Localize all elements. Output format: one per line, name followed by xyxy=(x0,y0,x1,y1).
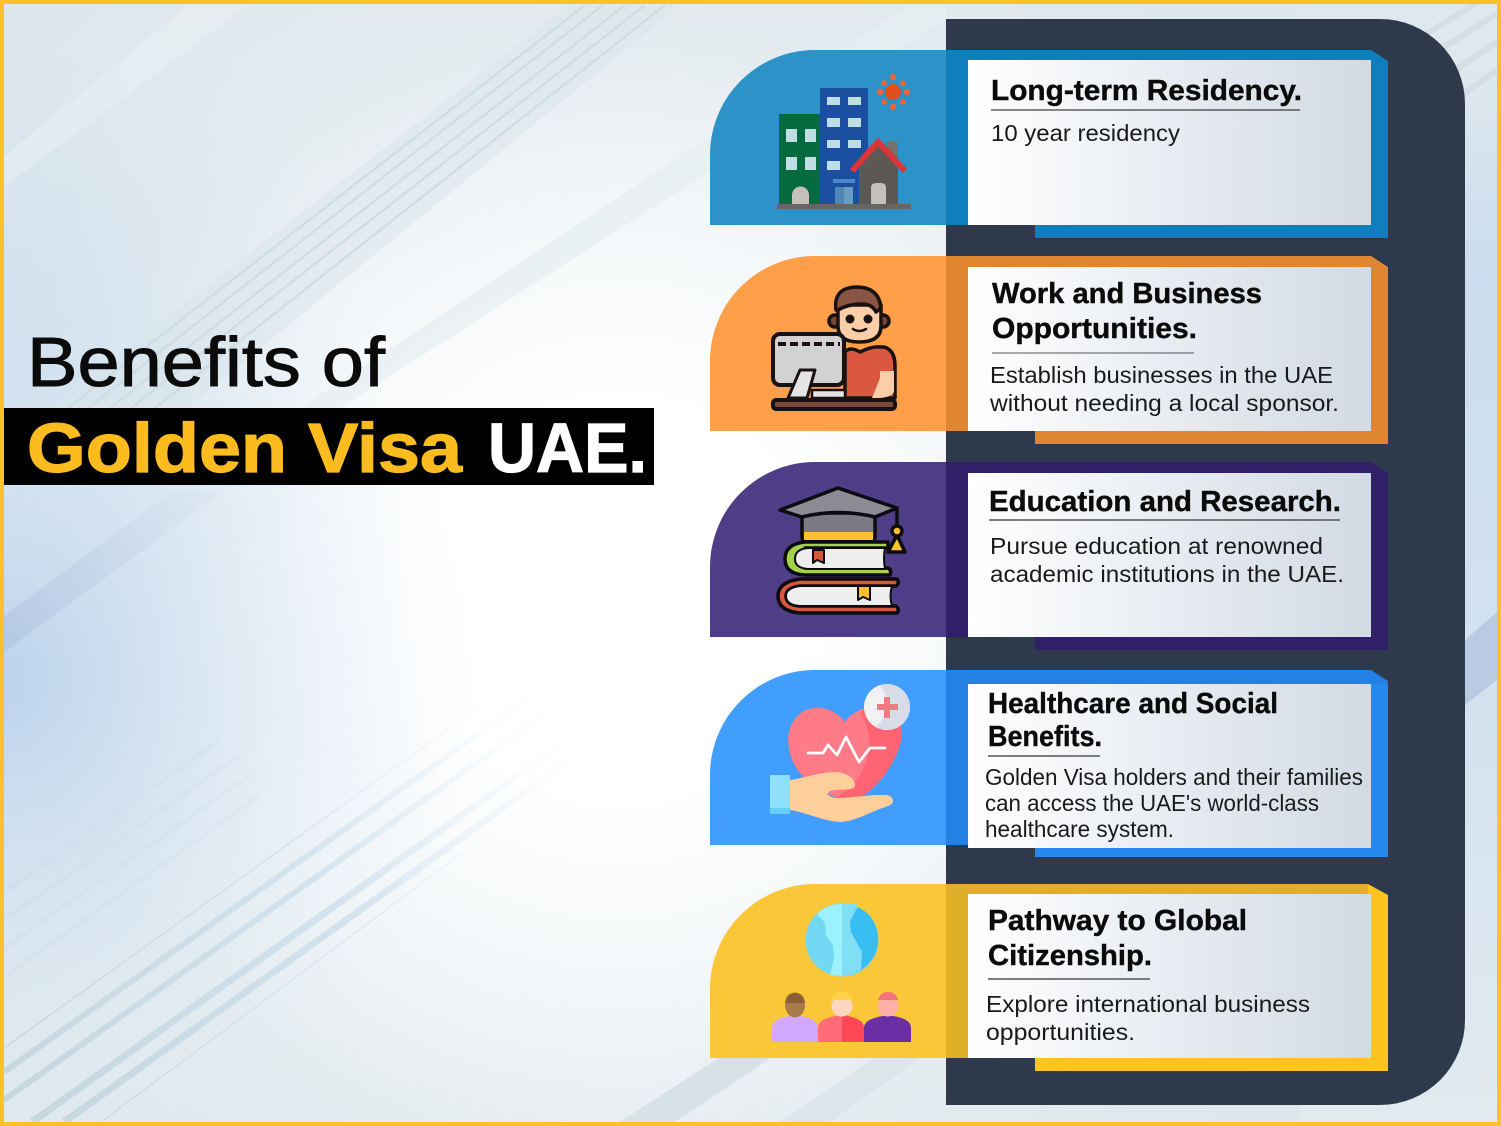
panel: healthcare and social benefits: can access the UAE's world-class xyxy=(985,790,1319,816)
title line: Golden Visa UAE: Golden Visa xyxy=(27,409,463,487)
frame xyxy=(946,884,1388,1071)
card xyxy=(968,60,1371,225)
icon: graduation cap and books xyxy=(778,488,905,613)
body text: Pursue education at renowned xyxy=(990,533,1323,559)
panel: healthcare and social benefits: healthcare system. xyxy=(985,816,1174,842)
title bar xyxy=(4,408,654,485)
heading: Healthcare and Social xyxy=(988,688,1278,720)
icon: heart in hand xyxy=(770,684,910,822)
tab xyxy=(710,884,970,1058)
card xyxy=(968,684,1371,848)
panel: work and business opportunities xyxy=(710,256,1388,444)
panel: education and research: academic institutions in the UAE. xyxy=(990,561,1344,587)
panel: healthcare and social benefits: Benefits. xyxy=(988,721,1102,753)
heading: Education and Research. xyxy=(989,486,1341,518)
heading: Pathway to Global xyxy=(988,905,1247,937)
heading: Long-term Residency. xyxy=(991,75,1302,107)
title word: UAE: UAE. xyxy=(488,409,647,487)
heading: Work and Business xyxy=(992,278,1262,310)
icon: person at computer xyxy=(773,287,895,409)
body text: 10 year residency xyxy=(991,120,1181,146)
panel: pathway to global citizenship xyxy=(710,884,1388,1071)
body text: Explore international business xyxy=(986,991,1310,1017)
panel: work and business opportunities: Opportunities. xyxy=(992,313,1197,345)
panel: pathway to global citizenship: Citizenship. xyxy=(988,940,1152,972)
body text: Establish businesses in the UAE xyxy=(990,362,1333,388)
body text: Golden Visa holders and their families xyxy=(985,764,1363,790)
panel: long-term residency xyxy=(710,50,1388,238)
panel: pathway to global citizenship: opportunities. xyxy=(986,1019,1135,1045)
tab xyxy=(710,256,970,431)
panel: education and research xyxy=(710,462,1388,650)
icon: city buildings xyxy=(777,74,911,209)
dark panel xyxy=(946,19,1465,1105)
title line: Benefits of: Benefits of xyxy=(27,323,386,401)
card xyxy=(968,267,1371,431)
frame xyxy=(946,50,1388,238)
icon: globe and people xyxy=(772,904,911,1042)
tab xyxy=(710,50,970,225)
panel: work and business opportunities: without needing a local sponsor. xyxy=(989,390,1339,416)
frame xyxy=(946,462,1388,650)
tab xyxy=(710,670,970,845)
panel: healthcare and social benefits xyxy=(710,670,1388,857)
frame xyxy=(946,670,1388,857)
card xyxy=(968,473,1371,637)
tab xyxy=(710,462,970,637)
card xyxy=(968,894,1371,1058)
title xyxy=(4,323,654,487)
frame xyxy=(946,256,1388,444)
